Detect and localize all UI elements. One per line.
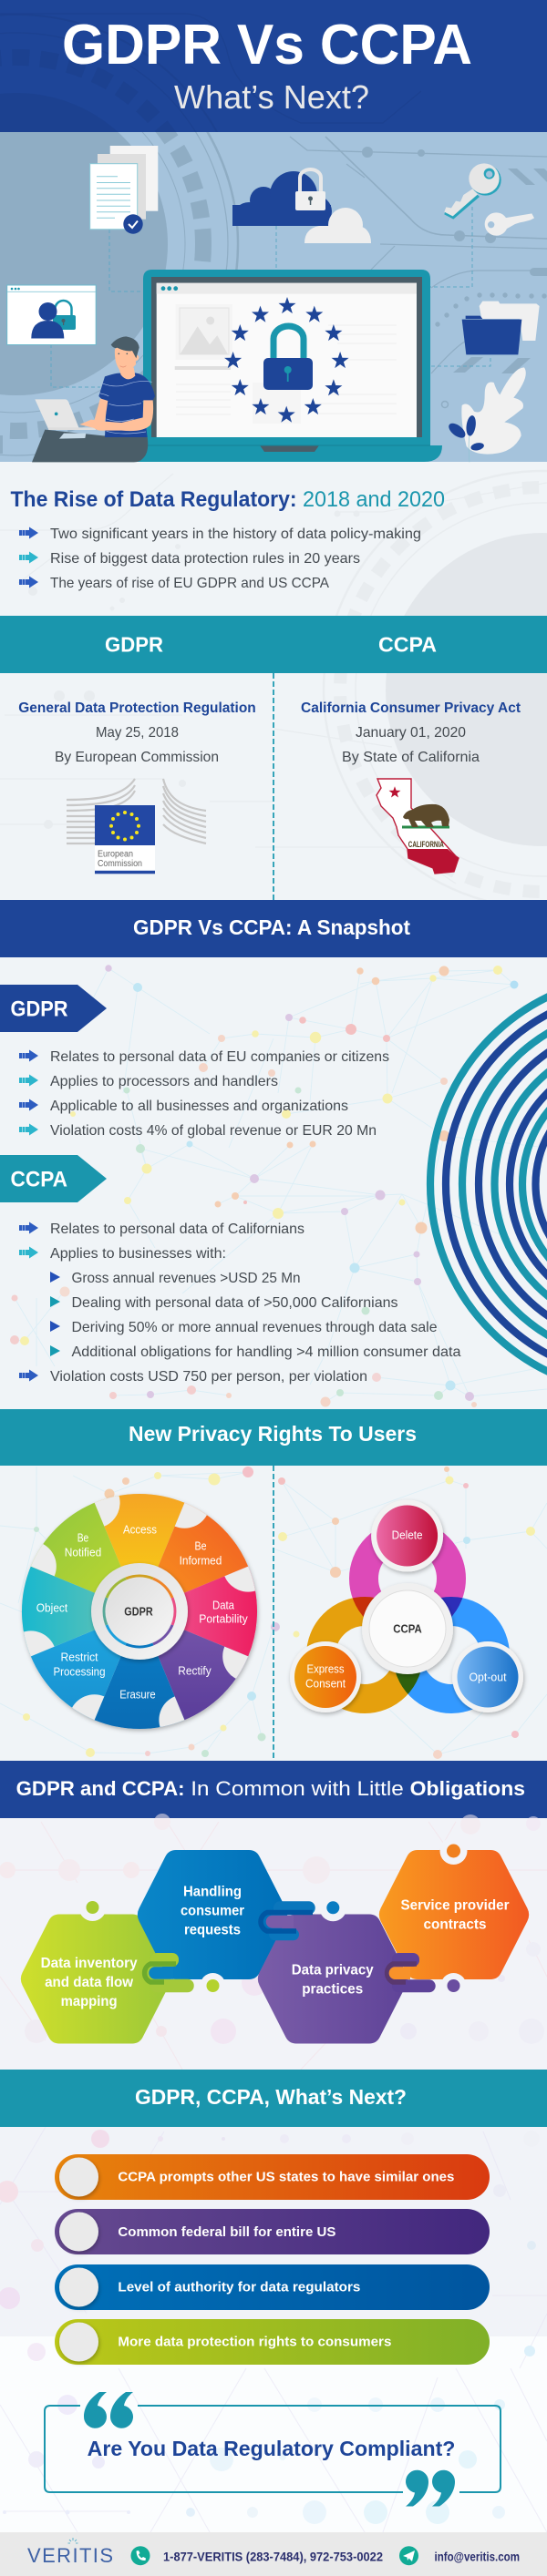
bullet list: GDPR: Relates to personal data of EU companies or citizens (50, 1049, 389, 1065)
connector: green to blue (145, 1953, 194, 1992)
wheel hub: GDPR: GDPR (124, 1605, 153, 1618)
connector: blue to purple (261, 1901, 315, 1940)
wheel segment: Be Notified (31, 1503, 121, 1593)
wheel segment: Erasure: Erasure (119, 1687, 156, 1702)
background pattern: data network 2 (0, 1467, 547, 1759)
arrow bullet (19, 1124, 38, 1135)
hexagon label: data privacy practices (292, 1962, 374, 1997)
panel: GDPR summary: By European Commission (55, 750, 219, 765)
arrow bullet 1 (19, 526, 38, 539)
illustration: data protection hero (0, 132, 547, 463)
icon: padlock (263, 326, 313, 390)
node: Delete (371, 1499, 443, 1572)
hexagon label: data privacy practices: Data privacy (292, 1962, 374, 1978)
background pattern: lower lattice (0, 2127, 547, 2532)
tag: GDPR (0, 985, 107, 1032)
triangle bullet (50, 1296, 60, 1307)
pill: level of authority: Level of authority for data regulators (118, 2279, 360, 2295)
bullet list: GDPR: Violation costs 4% of global revenue or EUR 20 Mn (50, 1123, 377, 1139)
node: Express Consent (290, 1641, 361, 1712)
wheel segment: Be Informed (158, 1503, 248, 1592)
background pattern: data network 1 (10, 965, 547, 1407)
tag: GDPR: GDPR (11, 997, 67, 1022)
triangle bullet (50, 1321, 60, 1332)
hexagon: service provider contracts (379, 1837, 529, 1998)
wheel segment: Be Notified: Notified (65, 1545, 101, 1559)
hexagon label: handling consumer requests: consumer (181, 1904, 244, 1918)
heading: the rise of data regulatory: 2018 and 2020 (303, 487, 445, 512)
panel: CCPA summary: January 01, 2020 (356, 725, 466, 741)
connector: purple to orange (387, 1953, 436, 1992)
panel: CCPA summary: California Consumer Privacy Act (301, 700, 521, 716)
wheel segment: Be Informed: Informed (180, 1554, 222, 1567)
bullet list: CCPA: Deriving 50% or more annual revenues through data sale (71, 1320, 438, 1335)
heading band: snapshot (0, 900, 547, 957)
background pattern: hexagon lattice (0, 1814, 547, 2070)
triangle bullet (50, 1345, 60, 1356)
callout: are you compliant: Are You Data Regulatory Compliant? (88, 2437, 455, 2460)
bullet list: rise of data regulatory: The years of rise of EU GDPR and US CCPA (50, 576, 329, 591)
bullet list: GDPR: Applies to processors and handlers (50, 1074, 278, 1089)
heading band: new privacy rights: New Privacy Rights To Users (129, 1422, 417, 1446)
hexagon label: service provider contracts: contracts (423, 1917, 487, 1933)
wheel segment: Object: Object (36, 1601, 68, 1614)
icon: European Commission logo: Commission (98, 859, 142, 869)
pill: more protection rights (55, 2319, 490, 2365)
node: Opt-out: Opt-out (469, 1671, 507, 1683)
icon: mail plane (399, 2546, 418, 2565)
bullet list: CCPA: Additional obligations for handling >4 million consumer data (71, 1344, 461, 1360)
icon: folders (462, 302, 540, 354)
icon: closing quote (406, 2470, 455, 2507)
icon: European Commission logo: European (98, 849, 133, 860)
icon: plant (446, 367, 526, 462)
wheel segment: Be Notified: Be (77, 1530, 88, 1545)
hexagon label: data inventory: mapping (61, 1994, 118, 2009)
arrow bullet (19, 1370, 38, 1381)
bullet list: CCPA: Gross annual revenues >USD 25 Mn (71, 1271, 301, 1286)
background pattern: circuit lines (328, 484, 547, 846)
arrow bullet 2 (19, 552, 38, 563)
icon: laptop with EU padlock (137, 270, 442, 462)
wheel segment: Access: Access (123, 1523, 157, 1536)
title: GDPR Vs CCPA (62, 14, 472, 77)
wheel segment: Data Portability (184, 1567, 257, 1656)
logo: Veritis: VERITIS (27, 2544, 113, 2567)
icon: opening quote (84, 2392, 133, 2428)
icon: ring of EU stars (224, 297, 349, 423)
wheel segment: Data Portability: Portability (199, 1612, 248, 1625)
icon: California state map (377, 779, 459, 874)
pill: level of authority (55, 2264, 490, 2310)
hexagon: data inventory (21, 1894, 170, 2044)
heading band: in common (0, 1761, 547, 1818)
hexagon label: data inventory (41, 1956, 138, 2009)
node: Delete: Delete (392, 1528, 423, 1541)
heading band: in common: Obligations (410, 1777, 525, 1800)
wheel segment: Access (95, 1494, 184, 1567)
heading band: what's next (0, 2070, 547, 2127)
hexagon label: data inventory: and data flow (45, 1975, 134, 1990)
decorative concentric rings (430, 976, 547, 1392)
wheel segment: Object (22, 1567, 95, 1656)
panel: CCPA summary: By State of California (342, 750, 480, 765)
footer: info@veritis.com (434, 2549, 520, 2563)
hexagon label: handling consumer requests: Handling (183, 1884, 242, 1900)
heading band: new privacy rights (0, 1409, 547, 1466)
heading band: in common: In Common with Little (191, 1777, 404, 1800)
tag: CCPA (0, 1155, 107, 1202)
bullet list: GDPR (19, 1049, 389, 1139)
icon: navy cloud with padlock (232, 168, 332, 226)
comparison header band: GDPR (105, 632, 163, 656)
bullet list: rise of data regulatory: Two significant years in the history of data policy-making (50, 526, 421, 542)
arrow bullet (19, 1075, 38, 1086)
arrow bullet (19, 1049, 38, 1062)
pill: federal bill: Common federal bill for entire US (118, 2224, 335, 2240)
icon: California state map: CALIFORNIA (408, 840, 444, 849)
chart: CCPA rights diagram (290, 1499, 523, 1712)
bullet list: CCPA: Violation costs USD 750 per person, per violation (50, 1369, 367, 1385)
pill: more protection rights: More data protection rights to consumers (118, 2334, 391, 2350)
arrow bullet (19, 1099, 38, 1111)
divider (273, 673, 274, 900)
hexagon flow: common obligations (21, 1837, 529, 2044)
node: Express Consent: Express (306, 1661, 345, 1676)
node: Express Consent: Consent (305, 1676, 346, 1691)
hexagon: handling consumer requests (138, 1850, 287, 1998)
footer (0, 2532, 547, 2576)
heading band: what's next: GDPR, CCPA, What’s Next? (135, 2085, 407, 2109)
arrow bullet (19, 1246, 38, 1259)
wheel segment: Restrict Processing: Processing (53, 1665, 106, 1678)
wheel segment: Restrict Processing: Restrict (60, 1651, 98, 1663)
comparison header band (0, 616, 547, 673)
header panel (0, 0, 547, 132)
node: Opt-out (452, 1641, 523, 1712)
heading: the rise of data regulatory: The Rise of Data Regulatory: (11, 487, 297, 512)
comparison header band: CCPA (378, 632, 437, 656)
chart: GDPR rights wheel (20, 1494, 261, 1733)
bullet list: CCPA: Relates to personal data of Californians (50, 1222, 304, 1237)
bullet list: rise of data regulatory: Rise of biggest data protection rules in 20 years (50, 551, 360, 567)
wheel segment: Data Portability: Data (212, 1598, 235, 1612)
triangle bullet (50, 1272, 60, 1283)
hexagon: data privacy practices (258, 1894, 408, 2044)
bullet list: GDPR: Applicable to all businesses and organizations (50, 1099, 348, 1114)
wheel segment: Erasure (95, 1656, 184, 1729)
pill: federal bill (55, 2209, 490, 2254)
node: CCPA hub: CCPA (393, 1621, 422, 1636)
footer: 1-877-VERITIS (283-7484), 972-753-0022 (163, 2549, 383, 2563)
wheel segment: Be Informed: Be (195, 1539, 206, 1552)
wheel hub: GDPR (91, 1563, 188, 1660)
hexagon label: data privacy practices: practices (302, 1982, 363, 1997)
hexagon label: data inventory: Data inventory (41, 1956, 138, 1971)
bullet list: CCPA: Applies to businesses with: (50, 1246, 226, 1262)
callout: are you compliant (45, 2392, 501, 2507)
icon: user with padlock card (7, 285, 96, 344)
panel: CCPA summary (301, 700, 521, 874)
hexagon label: service provider contracts: Service provider (401, 1898, 509, 1913)
bullet list: CCPA: Dealing with personal data of >50,000 Californians (71, 1295, 397, 1311)
heading band: snapshot: GDPR Vs CCPA: A Snapshot (133, 915, 410, 939)
icon: keys (444, 163, 534, 236)
wheel segment: Restrict Processing (31, 1630, 120, 1720)
pill: similar state laws: CCPA prompts other US states to have similar ones (118, 2170, 454, 2184)
heading: the rise of data regulatory (11, 487, 445, 512)
node: CCPA hub (362, 1583, 453, 1674)
pill: similar state laws (55, 2154, 490, 2200)
icon: European Commission logo (67, 779, 206, 874)
icon: person working on laptop (32, 336, 155, 462)
arrow bullet 3 (19, 576, 38, 588)
panel: GDPR summary: General Data Protection Regulation (18, 700, 256, 716)
overlapping rings (321, 1535, 495, 1699)
panel: GDPR summary: May 25, 2018 (96, 725, 179, 741)
hexagon label: handling consumer requests (181, 1884, 244, 1938)
heading band: in common: GDPR and CCPA: (16, 1777, 185, 1800)
hexagon label: service provider contracts (401, 1898, 509, 1933)
icon: white cloud (304, 208, 371, 243)
divider (273, 1466, 274, 1761)
arrow bullet (19, 1222, 38, 1233)
hexagon label: handling consumer requests: requests (184, 1922, 241, 1938)
panel: GDPR summary (18, 700, 256, 874)
bullet list: rise of data regulatory (19, 526, 421, 591)
wheel segment: Rectify (159, 1630, 248, 1720)
icon: documents with check (90, 146, 158, 234)
tag: CCPA: CCPA (11, 1168, 67, 1191)
bullet list: CCPA (19, 1222, 461, 1385)
icon: phone (131, 2546, 150, 2565)
subtitle: What’s Next? (174, 78, 369, 116)
wheel segment: Rectify: Rectify (178, 1663, 212, 1678)
